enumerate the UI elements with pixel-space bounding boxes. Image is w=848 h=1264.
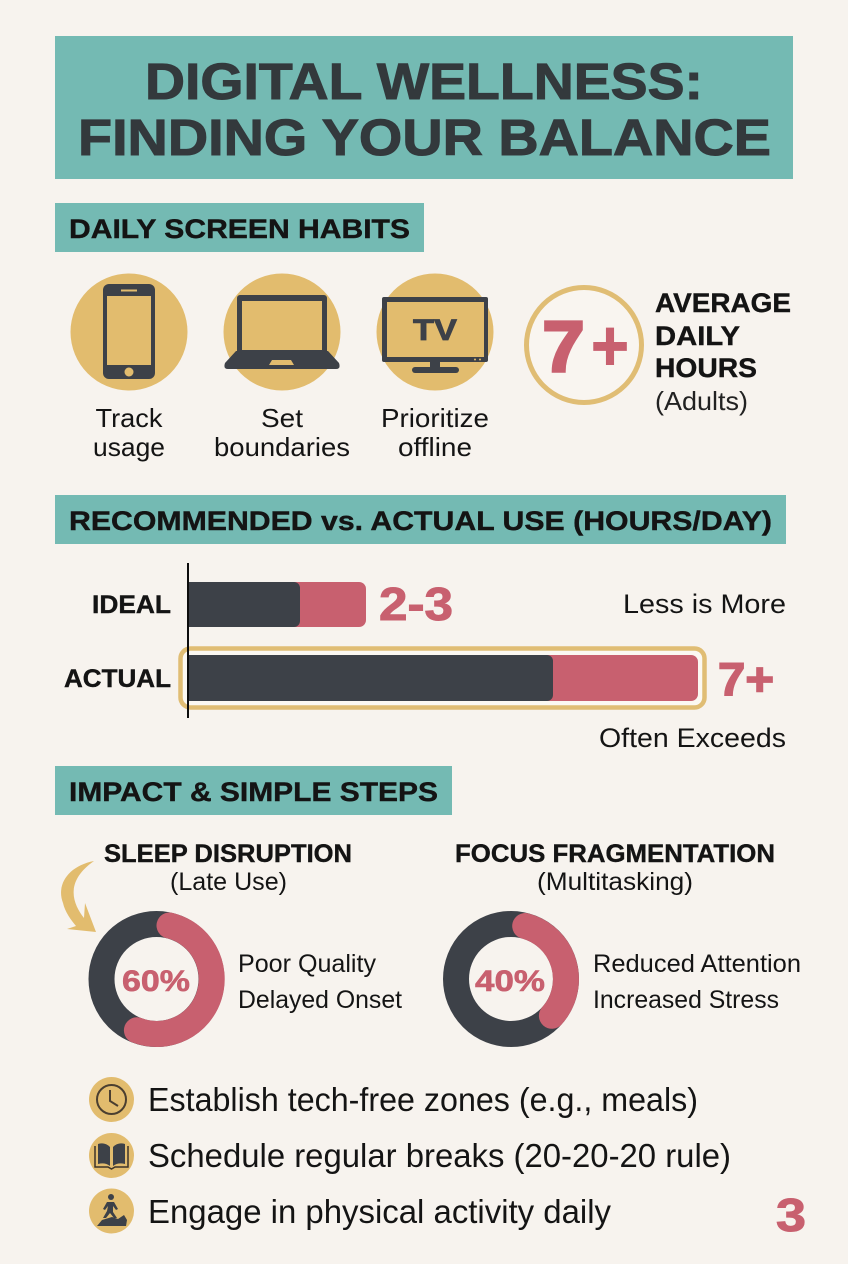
panel: focus fragmentation: Increased Stress xyxy=(593,986,779,1014)
stat: average daily hours xyxy=(526,288,791,416)
ideal bar: Less is More xyxy=(623,589,786,619)
icon: open book xyxy=(89,1133,134,1178)
section heading: impact and simple steps: IMPACT & SIMPLE STEPS xyxy=(69,777,438,807)
section heading: daily screen habits xyxy=(55,203,424,252)
panel: sleep disruption xyxy=(102,840,402,1034)
icon: laptop, set boundaries: boundaries xyxy=(214,432,350,462)
icon: television, prioritize offline: TV xyxy=(413,314,457,347)
section heading: recommended vs actual: RECOMMENDED vs. ACTUAL USE (HOURS/DAY) xyxy=(69,506,772,536)
panel: sleep disruption: Poor Quality xyxy=(238,950,377,978)
bar chart: recommended vs actual xyxy=(64,563,786,753)
section heading: recommended vs actual xyxy=(55,495,786,544)
panel: sleep disruption: (Late Use) xyxy=(170,868,287,896)
icon: laptop, set boundaries: Set xyxy=(261,403,304,433)
section heading: impact and simple steps xyxy=(55,766,452,815)
icon: phone, track usage xyxy=(70,274,188,462)
panel: focus fragmentation: Reduced Attention xyxy=(593,950,801,978)
step: physical activity: Engage in physical activity daily xyxy=(148,1193,611,1230)
actual bar: Often Exceeds xyxy=(599,723,786,753)
actual bar xyxy=(64,648,786,753)
title banner: FINDING YOUR BALANCE xyxy=(78,109,771,166)
donut chart: 60% xyxy=(102,924,212,1034)
stat: average daily hours: + xyxy=(591,307,629,386)
donut chart: 40%: 40% xyxy=(475,965,545,998)
step: tech-free zones: Establish tech-free zones (e.g., meals) xyxy=(148,1081,698,1118)
donut chart: 40% xyxy=(456,924,566,1034)
title banner xyxy=(55,36,793,179)
ideal bar: 2-3 xyxy=(379,578,453,630)
panel: sleep disruption: Delayed Onset xyxy=(238,986,402,1014)
stat: average daily hours: 7 xyxy=(542,308,584,387)
section heading: daily screen habits: DAILY SCREEN HABITS xyxy=(69,214,410,244)
icon: phone, track usage: Track xyxy=(96,403,164,433)
title banner: DIGITAL WELLNESS: xyxy=(145,53,703,110)
step: regular breaks: Schedule regular breaks (20-20-20 rule) xyxy=(148,1137,731,1174)
actual bar: ACTUAL xyxy=(64,665,171,693)
stat: average daily hours: DAILY xyxy=(655,321,740,351)
icon: laptop, set boundaries xyxy=(214,274,350,462)
panel: focus fragmentation: FOCUS FRAGMENTATION xyxy=(455,840,775,868)
ideal bar xyxy=(92,578,786,630)
ideal bar: IDEAL xyxy=(92,591,171,619)
stat: average daily hours: (Adults) xyxy=(655,386,748,416)
donut chart: 60%: 60% xyxy=(122,965,190,998)
actual bar: 7+ xyxy=(718,653,774,705)
panel: focus fragmentation: (Multitasking) xyxy=(537,868,693,896)
page number: 3 xyxy=(776,1189,806,1241)
icon: clock xyxy=(89,1077,134,1122)
icon: walking person xyxy=(89,1188,134,1234)
stat: average daily hours: AVERAGE xyxy=(655,288,791,318)
icon: television, prioritize offline: Prioritize xyxy=(381,403,489,433)
icon: television, prioritize offline: offline xyxy=(398,432,472,462)
icon: television, prioritize offline xyxy=(376,274,494,462)
icon: phone, track usage: usage xyxy=(93,432,165,462)
stat: average daily hours: HOURS xyxy=(655,353,757,383)
panel: focus fragmentation xyxy=(455,840,801,1034)
panel: sleep disruption: SLEEP DISRUPTION xyxy=(104,840,352,868)
arrow: curved gold xyxy=(61,861,96,932)
